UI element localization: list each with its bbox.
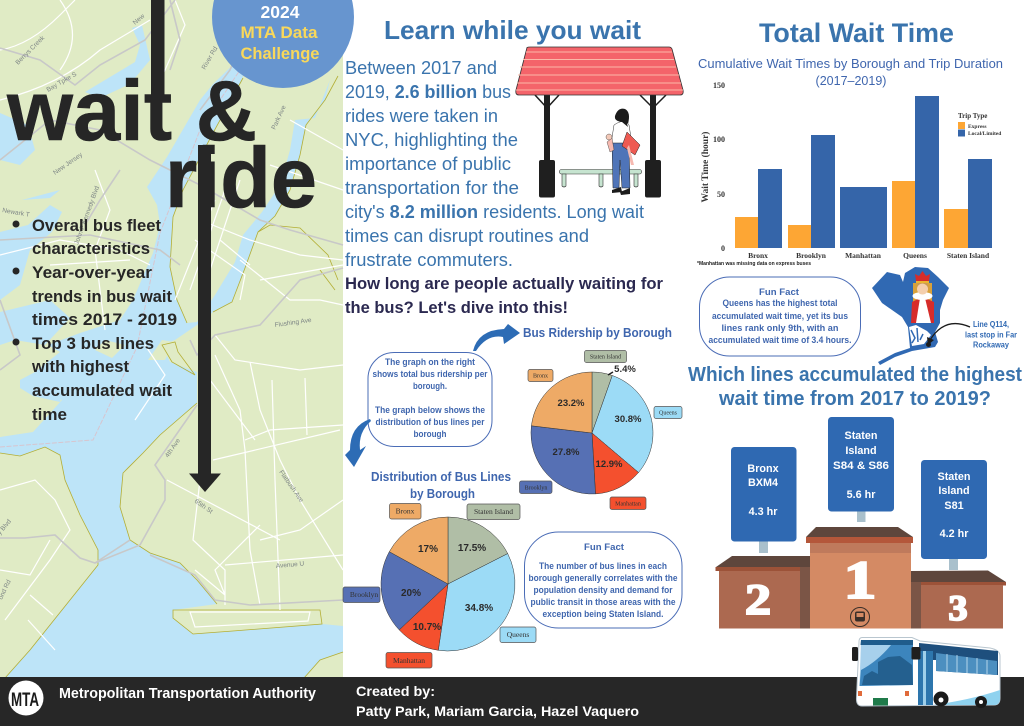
text block: intro paragraph: frustrate commuters. (345, 249, 513, 270)
logo: MTA: MTA (11, 690, 39, 711)
chart: cumulative wait time bars: 50 (717, 190, 725, 199)
chart: cumulative wait time bars: *Manhattan was missing data on express buses (697, 261, 811, 267)
heading: bar chart title: (2017–2019) (816, 74, 886, 88)
chart: cumulative wait time bars: 0 (721, 244, 725, 253)
icon: Queens map with queen and Q114 pointer (872, 267, 1017, 365)
heading: which lines accumulated the highest wait time (688, 364, 1022, 410)
map labels: John F Kennedy Blvd (73, 185, 101, 246)
callout: graph explanation: The graph below shows the (375, 405, 485, 416)
text: Metropolitan Transportation Authority: Metropolitan Transportation Authority (59, 686, 316, 702)
arrow: toward bus-line pie (345, 419, 371, 467)
heading: Bus Ridership by Borough: Bus Ridership by Borough (523, 326, 672, 340)
sign: Staten Island S84 and S86: 5.6 hr (847, 489, 876, 501)
callout: graph explanation: borough (414, 429, 447, 440)
map labels: Avenue U (276, 561, 305, 570)
callout: graph explanation: shows total bus ridership per (372, 369, 488, 380)
water: western creeks and Newark Bay (0, 25, 150, 300)
chart: distribution of bus lines pie: Queens (507, 630, 529, 639)
water: Hudson, upper and lower bay (0, 58, 343, 678)
chart: cumulative wait time bars: 150 (713, 81, 725, 90)
chart: bus ridership pie: Bronx (533, 374, 548, 380)
map labels: Bay Tpke S (46, 71, 79, 94)
heading: which lines accumulated the highest wait time: wait time from 2017 to 2019? (718, 388, 991, 410)
badge: 2024 MTA Data Challenge (212, 0, 354, 88)
map labels: Flatbush Ave (277, 469, 305, 504)
callout: Queens fun fact (700, 277, 860, 356)
sign: Staten Island S81: 4.2 hr (940, 528, 969, 540)
map labels: New Jersey (52, 151, 85, 177)
logo: MTA (8, 680, 44, 716)
panel: map background (0, 0, 343, 678)
callout: Queens fun fact: lines rank only 9th, with an (722, 323, 839, 334)
chart: cumulative wait time bars: Queens (903, 251, 927, 260)
callout: fun fact on bus lines: borough generally correlates with the (528, 573, 678, 584)
chart: distribution of bus lines pie: 10.7% (413, 622, 441, 633)
text: credits: Created by: (356, 683, 435, 699)
chart: cumulative wait time bars: Bronx (748, 251, 768, 260)
bullet list: report contents: Top 3 bus lines (32, 335, 154, 353)
text block: key question: the bus? Let's dive into this! (345, 298, 568, 317)
bullet list: report contents: Overall bus fleet (32, 217, 161, 235)
sign: Bronx BXM4: Bronx (747, 463, 779, 475)
map labels: 4th Ave (164, 437, 182, 459)
callout: fun fact on bus lines (524, 532, 682, 628)
land: Bayonne and islands (0, 340, 174, 437)
chart: distribution of bus lines pie: 17.5% (458, 543, 486, 554)
bullet list: report contents: with highest (31, 358, 130, 376)
text block: intro paragraph: transportation for the (345, 177, 519, 198)
icon: bus shelter with commuter (516, 47, 683, 198)
callout: graph explanation (368, 352, 492, 446)
badge: 2024 MTA Data Challenge: 2024 (261, 2, 300, 22)
arrow: toward ridership pie (473, 324, 520, 351)
badge: 2024 MTA Data Challenge: MTA Data (240, 23, 318, 42)
chart legend: trip type: Express (968, 124, 987, 130)
chart: podium with top three lines (716, 417, 1006, 628)
chart: distribution of bus lines pie: Brooklyn (350, 590, 378, 599)
heading: Distribution of Bus Lines by Borough: Distribution of Bus Lines (371, 469, 511, 484)
map labels: River Rd (201, 45, 220, 71)
chart: bus ridership pie: Queens (659, 410, 678, 416)
major roads (0, 0, 343, 650)
text block: intro paragraph: city's 8.2 million residents. Long wait (345, 201, 644, 222)
chart: bus ridership pie: Brooklyn (525, 486, 547, 492)
heading: Total Wait Time: Total Wait Time (759, 18, 954, 48)
sign: Staten Island S81: Island (938, 485, 970, 497)
bullet list: report contents: Year-over-year (32, 264, 153, 282)
bullet list: report contents: accumulated wait (32, 382, 173, 400)
chart: cumulative wait time bars: Staten Island (947, 251, 990, 260)
sign: Bronx BXM4: 4.3 hr (749, 506, 778, 518)
chart legend: trip type: Trip Type (958, 112, 987, 120)
icon: Queens map with queen and Q114 pointer: last stop in Far (965, 330, 1017, 340)
chart: distribution of bus lines pie: Bronx (396, 506, 415, 516)
sign: Bronx BXM4: BXM4 (748, 477, 778, 489)
map labels: Park Ave (270, 104, 288, 131)
chart: bus ridership pie: 5.4% (614, 364, 636, 375)
podium third place: 3 (948, 588, 968, 628)
chart legend: trip type (958, 112, 1001, 137)
chart: distribution of bus lines pie (343, 504, 536, 668)
podium second place (716, 541, 812, 628)
icon: Queens map with queen and Q114 pointer: Rockaway (973, 340, 1009, 350)
text block: key question (345, 274, 663, 317)
callout: fun fact on bus lines: The number of bus lines in each (539, 561, 667, 572)
bullet list: report contents: characteristics (32, 240, 150, 258)
footer bar (0, 677, 1024, 726)
sign: Staten Island S81 (921, 460, 987, 559)
chart: bus ridership pie (520, 350, 682, 510)
sign: Staten Island S84 and S86: Island (845, 445, 877, 457)
callout: fun fact on bus lines: Fun Fact (584, 542, 625, 553)
callout: fun fact on bus lines: exception being Staten Island. (542, 609, 664, 620)
map labels: Newark T (2, 207, 30, 219)
callout: Queens fun fact: accumulated wait time of 3.4 hours. (708, 335, 852, 346)
heading: Distribution of Bus Lines by Borough (371, 469, 511, 501)
callout: Queens fun fact: accumulated wait time, yet its bus (712, 311, 848, 322)
callout: Queens fun fact: Fun Fact (759, 287, 800, 298)
chart: distribution of bus lines pie: 34.8% (465, 603, 493, 614)
coastline (0, 447, 98, 678)
map labels (0, 13, 312, 601)
text block: intro paragraph (345, 57, 644, 270)
chart: bus ridership pie: 23.2% (558, 398, 585, 409)
callout: fun fact on bus lines: public transit in those areas with the (530, 597, 676, 608)
text block: intro paragraph: Between 2017 and (345, 57, 497, 78)
chart: distribution of bus lines pie: 20% (401, 588, 421, 599)
text: credits: Patty Park, Mariam Garcia, Hazel Vaquero (356, 703, 639, 719)
chart legend: trip type: Local/Limited (968, 131, 1001, 137)
callout: graph explanation: The graph on the right (385, 357, 476, 368)
sign: Staten Island S81: S81 (944, 500, 964, 512)
text block: intro paragraph: rides were taken in (345, 105, 498, 126)
bullet list: report contents: times 2017 - 2019 (32, 311, 177, 329)
callout: fun fact on bus lines: population density and demand for (534, 585, 673, 596)
chart: cumulative wait time bars (697, 81, 1001, 267)
title: wait & ride: ride (165, 131, 317, 226)
icon: bus (852, 638, 1000, 708)
chart: bus ridership pie: Staten Island (590, 354, 621, 360)
heading: bar chart title (698, 57, 1003, 88)
chart: cumulative wait time bars: Brooklyn (796, 251, 827, 260)
chart: distribution of bus lines pie: Manhattan (393, 656, 425, 665)
podium second place: 2 (745, 577, 771, 624)
bullet list: report contents (12, 217, 177, 424)
heading: Distribution of Bus Lines by Borough: by Borough (410, 486, 475, 501)
title: wait & ride (6, 0, 317, 226)
map labels: New (132, 13, 146, 27)
bullet list: report contents: trends in bus wait (32, 288, 172, 306)
text block: intro paragraph: importance of public (345, 153, 511, 174)
sign: Bronx BXM4 (731, 447, 796, 542)
sign: Staten Island S84 and S86: Staten (844, 430, 878, 442)
callout: graph explanation: distribution of bus lines per (376, 417, 485, 428)
text block: intro paragraph: times can disrupt routines and (345, 225, 589, 246)
text: credits (356, 683, 639, 719)
chart: cumulative wait time bars: Wait Time (hour) (700, 132, 711, 202)
chart: cumulative wait time bars: 100 (713, 135, 725, 144)
podium third place (911, 559, 1006, 628)
podium first place: 1 (844, 550, 876, 610)
map labels: Flushing Ave (274, 317, 312, 329)
icon: Queens map with queen and Q114 pointer: Line Q114, (973, 320, 1009, 329)
callout: Queens fun fact: Queens has the highest total (722, 298, 838, 309)
arrow: down through the map (189, 145, 221, 492)
chart: distribution of bus lines pie: Staten Island (474, 507, 513, 516)
title: wait & ride: wait & (6, 64, 257, 159)
chart: cumulative wait time bars: Manhattan (845, 251, 882, 260)
text block: intro paragraph: NYC, highlighting the (345, 129, 518, 150)
chart: bus ridership pie: 12.9% (596, 459, 623, 470)
text block: key question: How long are people actually waiting for (345, 274, 663, 293)
bullet list: report contents: time (32, 406, 67, 424)
map labels: Berrys Creek (14, 34, 47, 66)
sign: Staten Island S84 and S86: S84 & S86 (833, 460, 889, 472)
text block: intro paragraph: 2019, 2.6 billion bus (345, 81, 511, 102)
heading: Learn while you wait: Learn while you wait (384, 15, 641, 45)
badge: 2024 MTA Data Challenge: Challenge (240, 44, 320, 63)
chart: bus ridership pie: 27.8% (553, 447, 580, 458)
chart: bus ridership pie: Manhattan (615, 502, 641, 508)
sign: Staten Island S84 and S86 (828, 417, 894, 512)
callout: graph explanation: borough. (413, 381, 447, 392)
chart: bus ridership pie: 30.8% (615, 414, 642, 425)
heading: bar chart title: Cumulative Wait Times by Borough and Trip Duration (698, 57, 1003, 71)
highways (0, 0, 343, 605)
podium first place (806, 511, 913, 628)
sign: Staten Island S81: Staten (938, 471, 970, 483)
chart: distribution of bus lines pie: 17% (418, 544, 438, 555)
map labels: 65th St (193, 498, 214, 516)
